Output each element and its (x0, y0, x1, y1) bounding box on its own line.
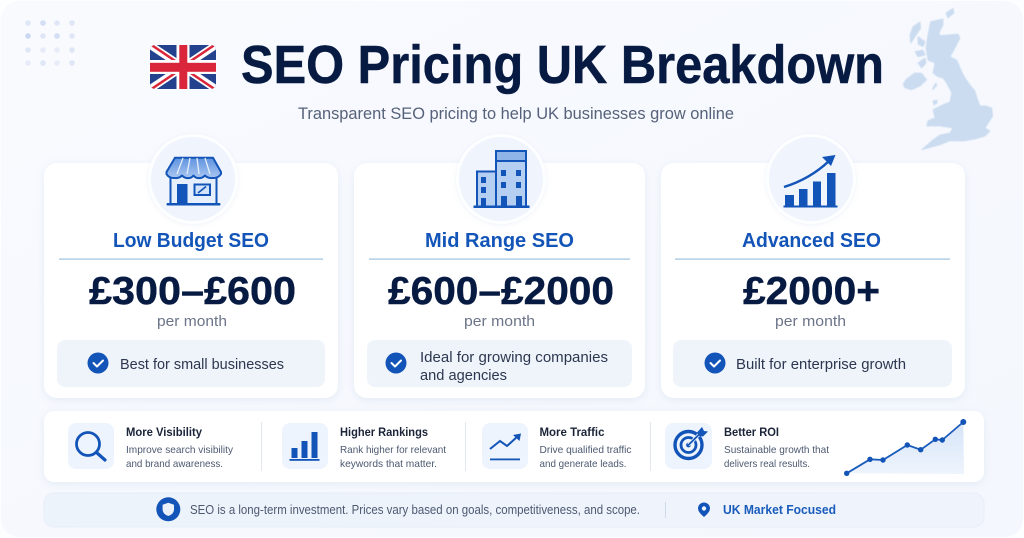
benefit: More Traffic: More Traffic (540, 425, 605, 439)
icon: shield (156, 497, 180, 521)
benefit: Better ROI (665, 423, 829, 470)
benefit: More Visibility (68, 423, 234, 470)
panel: Mid Range SEO (354, 134, 645, 398)
subtitle: Transparent SEO pricing to help UK businesses grow online (298, 104, 734, 123)
per month: per month (775, 313, 846, 330)
benefit: More Traffic: and generate leads. (540, 458, 626, 470)
card background (354, 163, 645, 398)
note text: SEO is a long-term investment. Prices vary based on goals, competitiveness, and scope. (190, 503, 640, 517)
panel: Low Budget SEO (44, 134, 338, 398)
heading: Low Budget SEO (113, 230, 269, 252)
heading: Advanced SEO (742, 230, 881, 252)
map: United Kingdom (903, 8, 993, 150)
heading: Mid Range SEO (425, 230, 574, 252)
benefit: More Traffic: Drive qualified traffic (540, 444, 632, 456)
card background (44, 163, 338, 398)
benefit (673, 340, 952, 387)
per month: per month (464, 313, 535, 330)
icon: shop (148, 134, 238, 224)
icon: growth chart (766, 134, 856, 224)
price: £600–£2000 (388, 270, 614, 313)
price: £300–£600 (89, 270, 296, 313)
icon: office buildings (456, 134, 546, 224)
per month: per month (157, 313, 227, 330)
benefit: Higher Rankings: keywords that matter. (340, 458, 437, 470)
benefit: More Visibility: Improve search visibility (126, 444, 234, 456)
card background (661, 163, 965, 398)
benefit: Higher Rankings: Rank higher for relevant (340, 444, 446, 456)
panel: Advanced SEO (661, 134, 965, 398)
line chart: growth (844, 419, 966, 476)
panel: footer note (44, 493, 984, 527)
price: £2000+ (743, 270, 880, 313)
title: SEO Pricing UK Breakdown (241, 35, 884, 95)
benefit: Better ROI: Sustainable growth that (724, 444, 829, 456)
panel: benefits strip (44, 411, 984, 482)
benefit: Ideal for growing companies (420, 349, 608, 366)
benefit: and agencies (420, 367, 507, 384)
benefit (57, 340, 325, 387)
benefit: Higher Rankings (282, 423, 446, 470)
benefit: Better ROI: Better ROI (724, 425, 779, 439)
benefit: Best for small businesses (120, 356, 284, 373)
icon: UK flag (150, 44, 216, 90)
UK market label: UK Market Focused (723, 503, 836, 517)
benefit: Better ROI: delivers real results. (724, 458, 810, 470)
benefit: More Visibility: and brand awareness. (126, 458, 223, 470)
benefit: More Traffic (482, 423, 632, 470)
benefit: More Visibility: More Visibility (126, 425, 202, 439)
strip background (44, 411, 984, 482)
icon: map pin (698, 502, 710, 517)
benefit: Built for enterprise growth (736, 356, 906, 373)
decorative dot grid (25, 20, 75, 66)
benefit: Higher Rankings: Higher Rankings (340, 425, 428, 439)
note background (44, 493, 984, 527)
benefit (367, 340, 632, 387)
